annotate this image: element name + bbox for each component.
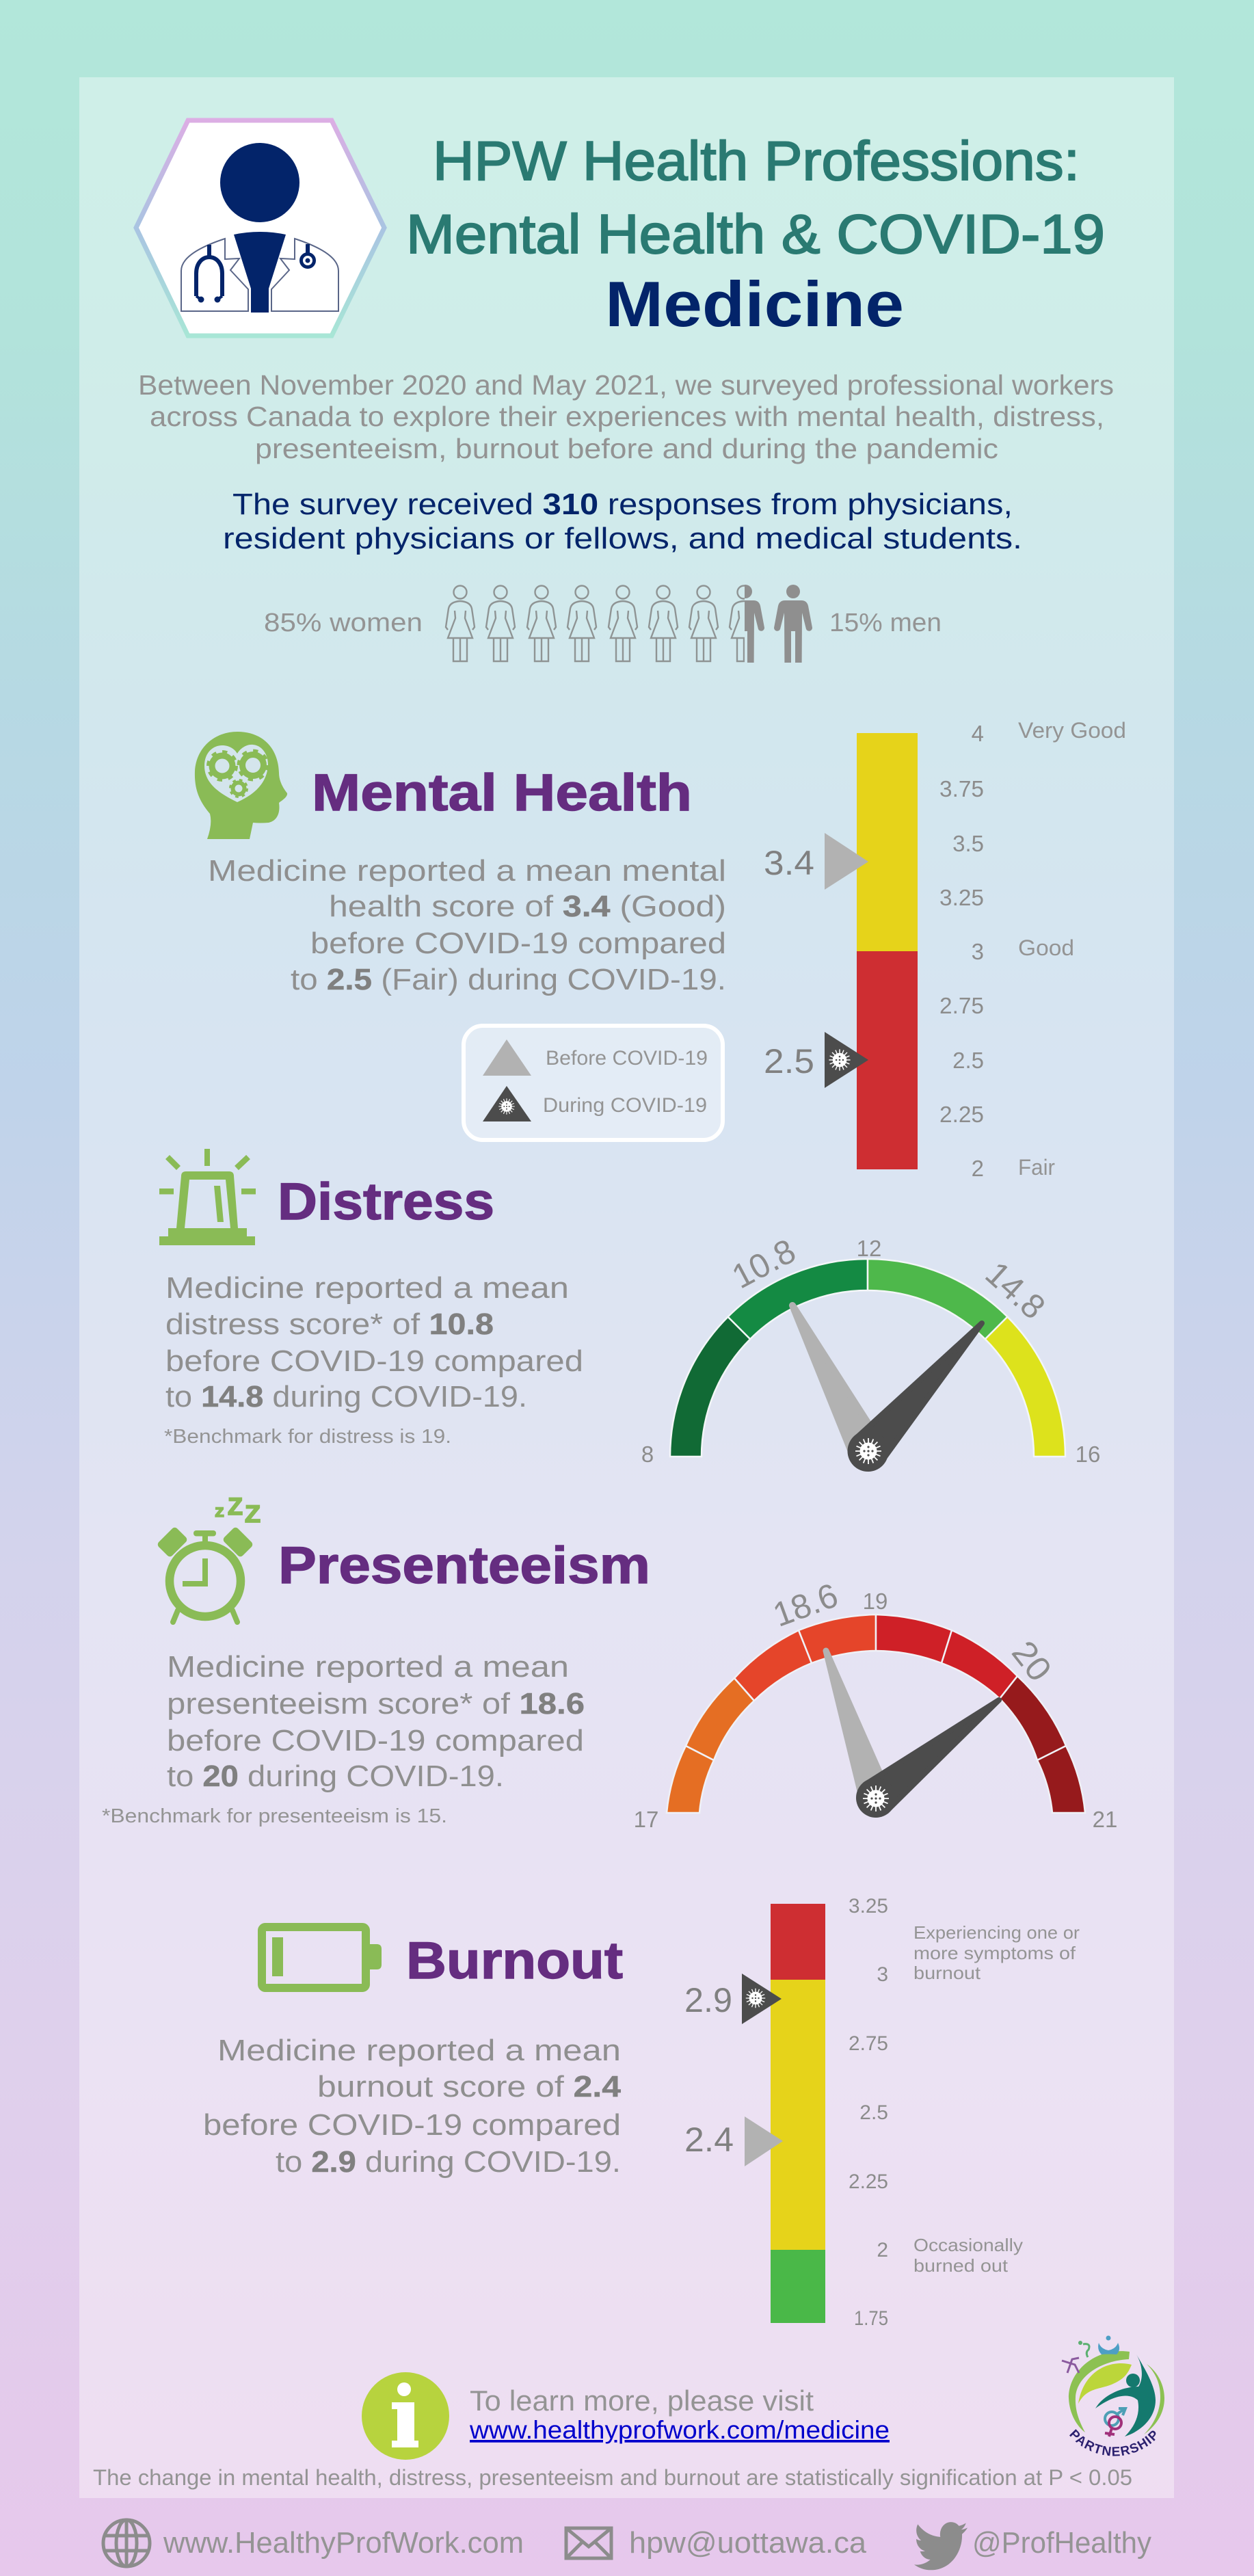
- intro text: Between November 2020 and May 2021, we surveyed professional workers: [138, 369, 1114, 401]
- bar chart: mental health scale: Good: [1018, 935, 1074, 960]
- body text: to 14.8 during COVID-19.: [165, 1380, 527, 1413]
- bar chart: burnout scale: 2.25: [849, 2170, 888, 2193]
- gauge: distress: 14.8: [978, 1254, 1052, 1327]
- gauge: distress: 16: [1076, 1442, 1100, 1467]
- bar chart: mental health scale: 4: [972, 721, 984, 746]
- body text: Medicine reported a mean mental: [208, 854, 726, 888]
- legend: Before COVID-19: [546, 1047, 708, 1070]
- bar chart: mental health scale: Very Good: [1018, 718, 1126, 743]
- body text: before COVID-19 compared: [167, 1724, 584, 1757]
- gauge: presenteeism: 17: [634, 1807, 658, 1832]
- bar chart: burnout scale: [771, 1895, 1080, 2330]
- panel: mental health: [195, 718, 1126, 1181]
- gauge: presenteeism: 19: [863, 1589, 888, 1614]
- gauge: distress: 8: [641, 1442, 654, 1467]
- needle: during 20: [856, 1700, 999, 1818]
- learn more text: [469, 2385, 890, 2444]
- body text: before COVID-19 compared: [165, 1344, 583, 1378]
- icon: siren: [159, 1149, 256, 1245]
- body text: burnout score of 2.4: [317, 2070, 622, 2103]
- marker: during 2.9: 2.9: [684, 1981, 732, 2019]
- body text: Medicine reported a mean: [165, 1271, 569, 1305]
- footnote: *Benchmark for presenteeism is 15.: [102, 1805, 447, 1827]
- icon: alarm clock with zzz: Z: [228, 1493, 243, 1520]
- gender split pictogram: [264, 585, 942, 663]
- logo: HPW partnership: [1061, 2336, 1164, 2456]
- bar chart: burnout scale: 2.5: [859, 2101, 888, 2124]
- body text: [167, 1650, 585, 1793]
- icon: alarm clock with zzz: z: [215, 1500, 224, 1521]
- bar chart: burnout scale: Experiencing one or: [913, 1922, 1080, 1943]
- bar chart: mental health scale: 2.5: [952, 1048, 984, 1073]
- bar chart: burnout scale: 1.75: [854, 2307, 888, 2330]
- footer contacts: [103, 2520, 1151, 2570]
- heading: Distress: [278, 1173, 494, 1231]
- survey responses text: [223, 488, 1022, 555]
- bar chart: burnout scale: burnout: [913, 1963, 981, 1983]
- intro text: across Canada to explore their experiences with mental health, distress,: [150, 401, 1104, 432]
- marker: before 3.4: 3.4: [764, 844, 814, 882]
- legend: [464, 1026, 723, 1140]
- panel: burnout: [203, 1895, 1080, 2330]
- bar chart: mental health scale: 3.25: [939, 885, 984, 910]
- gauge: distress: 12: [857, 1236, 881, 1261]
- gender split pictogram: 85% women: [264, 609, 423, 637]
- icon: doctor in hexagon: [136, 120, 384, 336]
- gauge: presenteeism: [634, 1576, 1117, 1832]
- title: HPW Health Professions:: [433, 131, 1080, 192]
- bar chart: burnout scale: 2.75: [849, 2032, 888, 2055]
- gauge: distress: 10.8: [725, 1232, 802, 1296]
- gauge: distress: [641, 1232, 1100, 1472]
- intro text: [138, 369, 1114, 464]
- panel: distress: [159, 1149, 1100, 1472]
- body text: to 20 during COVID-19.: [167, 1760, 504, 1793]
- twitter handle: @ProfHealthy: [972, 2526, 1151, 2560]
- bar chart: burnout scale: burned out: [913, 2255, 1009, 2276]
- legend: During COVID-19: [543, 1094, 707, 1117]
- body text: to 2.5 (Fair) during COVID-19.: [291, 963, 726, 996]
- footnote: *Benchmark for distress is 19.: [164, 1426, 451, 1448]
- panel: presenteeism: [102, 1493, 1117, 1832]
- body text: [208, 854, 726, 996]
- marker: before 3.4: [764, 833, 868, 890]
- marker: during 2.9: [684, 1974, 782, 2024]
- bar chart: burnout scale: 3: [877, 1963, 888, 1986]
- learn more text: To learn more, please visit: [470, 2385, 814, 2417]
- body text: presenteeism score* of 18.6: [167, 1687, 585, 1721]
- body text: distress score* of 10.8: [165, 1307, 494, 1341]
- icon: envelope: [566, 2528, 611, 2558]
- icon: globe: [103, 2520, 150, 2566]
- bar chart: burnout scale: Occasionally: [913, 2235, 1023, 2255]
- learn more text: www.healthyprofwork.com/medicine: [469, 2416, 890, 2444]
- icon: twitter bird: [914, 2522, 968, 2570]
- survey responses text: The survey received 310 responses from physicians,: [232, 488, 1013, 521]
- body text: Medicine reported a mean: [217, 2034, 621, 2067]
- icon: information: [362, 2372, 449, 2460]
- bar chart: mental health scale: [857, 718, 1126, 1181]
- icon: low battery: [262, 1927, 382, 1988]
- website: www.HealthyProfWork.com: [163, 2526, 524, 2560]
- title: [406, 131, 1105, 265]
- icon: alarm clock with zzz: Z: [245, 1501, 261, 1528]
- intro text: presenteeism, burnout before and during the pandemic: [255, 433, 998, 464]
- gender split pictogram: 15% men: [829, 609, 942, 637]
- bar chart: mental health scale: 3.75: [939, 776, 984, 801]
- marker: during 2.5: 2.5: [764, 1042, 814, 1080]
- icon: head with gears: [195, 732, 287, 839]
- body text: Medicine reported a mean: [167, 1650, 569, 1684]
- marker: before 2.4: 2.4: [684, 2121, 734, 2159]
- bar chart: mental health scale: Fair: [1018, 1155, 1055, 1180]
- email: hpw@uottawa.ca: [629, 2526, 867, 2560]
- bar chart: burnout scale: 2: [877, 2239, 888, 2261]
- bar chart: mental health scale: 2.75: [939, 993, 984, 1018]
- body text: [203, 2034, 622, 2179]
- needle: before 18.6: [826, 1651, 889, 1802]
- body text: [165, 1271, 583, 1413]
- heading: Presenteeism: [278, 1537, 650, 1595]
- bar chart: burnout scale: 3.25: [849, 1895, 888, 1917]
- heading: Burnout: [406, 1932, 623, 1990]
- body text: before COVID-19 compared: [310, 927, 726, 960]
- gauge: presenteeism: 20: [1004, 1634, 1059, 1688]
- body text: to 2.9 during COVID-19.: [276, 2145, 621, 2179]
- body text: before COVID-19 compared: [203, 2108, 621, 2142]
- body text: health score of 3.4 (Good): [329, 890, 726, 923]
- bar chart: mental health scale: 3: [972, 939, 984, 964]
- marker: during 2.5: [764, 1032, 868, 1088]
- bar chart: mental health scale: 2: [972, 1156, 984, 1181]
- needle: during 14.8: [848, 1323, 982, 1472]
- icon: alarm clock with zzz: [157, 1493, 261, 1622]
- title: Mental Health & COVID-19: [406, 204, 1105, 265]
- needle: before 10.8: [792, 1305, 881, 1458]
- subtitle: Medicine: Medicine: [605, 268, 904, 340]
- logo: HPW partnership: PARTNERSHIP: [1069, 2429, 1156, 2456]
- gauge: presenteeism: 21: [1093, 1807, 1117, 1832]
- bar chart: burnout scale: more symptoms of: [913, 1943, 1076, 1963]
- bar chart: mental health scale: 2.25: [939, 1102, 984, 1127]
- survey responses text: resident physicians or fellows, and medical students.: [223, 522, 1022, 555]
- bar chart: mental health scale: 3.5: [952, 831, 984, 856]
- gauge: presenteeism: 18.6: [768, 1576, 843, 1634]
- marker: before 2.4: [684, 2116, 783, 2166]
- heading: Mental Health: [312, 764, 692, 822]
- significance note: The change in mental health, distress, presenteeism and burnout are statistically signification at P < 0.05: [93, 2465, 1132, 2490]
